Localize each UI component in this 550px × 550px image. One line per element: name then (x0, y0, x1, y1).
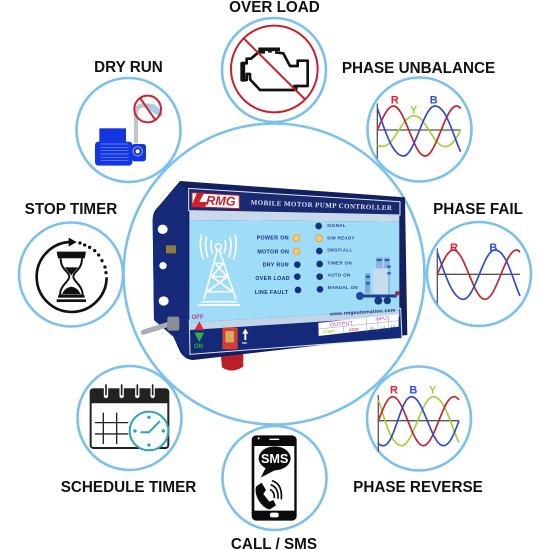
chart: unbalanced waves: B (430, 95, 438, 107)
enclosure (153, 181, 407, 360)
screen (189, 220, 399, 323)
output and input panel: STOP (349, 327, 359, 332)
header band (189, 188, 400, 215)
indicator lamps right (315, 223, 323, 293)
panel: dry run (76, 78, 180, 182)
indicator labels right: SIM READY (327, 235, 355, 240)
indicator labels right: SMS/CALL (327, 248, 353, 253)
panel: stop timer (19, 222, 123, 326)
website url: www.rmgautomation.com (329, 308, 396, 318)
logo RMG: RMG (206, 194, 236, 209)
output and input panel: L3 (391, 324, 395, 328)
sim arrow (242, 329, 248, 345)
tower graphic (198, 235, 240, 305)
indicator labels right: MANUAL ON (328, 285, 358, 290)
output and input panel: L2 (381, 325, 385, 329)
sim slot (222, 328, 238, 349)
chart: reversed waves: R (390, 385, 398, 397)
indicator lamps left (293, 235, 301, 293)
panel: phase reverse (367, 366, 471, 470)
chart: reversed waves (378, 385, 459, 452)
heading: dry run: DRY RUN (94, 59, 163, 76)
indicator labels left (255, 236, 290, 296)
chart: two-phase waves: R (450, 242, 458, 254)
chart: unbalanced waves: Y (410, 105, 418, 117)
panel: controller device circle (124, 124, 424, 424)
logo RMG (191, 193, 239, 209)
on marker (194, 333, 204, 350)
panel: schedule timer (78, 366, 182, 470)
panel: over load (222, 18, 326, 122)
icon: calendar with clock (90, 385, 168, 450)
output and input panel: L1 (370, 326, 374, 330)
chart: reversed waves: Y (429, 385, 437, 397)
output and input panel (318, 314, 399, 336)
face bottom band (189, 308, 402, 354)
sim arrow: SIM (242, 341, 247, 345)
output and input panel: OUTPUT (330, 321, 354, 329)
output and input panel: START (323, 329, 336, 334)
off marker (192, 315, 204, 330)
icon: hourglass timer (37, 238, 108, 312)
icon: smartphone with sms: SMS (261, 452, 288, 466)
panel: phase fail (427, 222, 531, 326)
indicator labels left: LINE FAULT (255, 290, 289, 296)
on marker: ON (194, 344, 203, 350)
panel: phase unbalance (368, 78, 472, 182)
side panel (153, 183, 189, 357)
indicator labels left: OVER LOAD (255, 276, 290, 282)
chart: unbalanced waves (377, 95, 461, 158)
device title: MOBILE MOTOR PUMP CONTROLLER (251, 199, 393, 212)
lower light strip (189, 310, 399, 330)
red push button (221, 354, 243, 370)
icon: dry pump (95, 96, 163, 166)
heading: schedule timer: SCHEDULE TIMER (61, 479, 196, 496)
chart: two-phase waves: B (489, 242, 497, 254)
heading: phase reverse: PHASE REVERSE (353, 479, 483, 496)
indicator labels right (327, 223, 358, 290)
heading: phase fail: PHASE FAIL (433, 201, 523, 218)
indicator labels right: AUTO ON (328, 273, 351, 278)
indicator labels left: MOTOR ON (257, 249, 289, 255)
antenna connector (166, 245, 176, 253)
indicator labels left: DRY RUN (263, 263, 289, 269)
chart: reversed waves: B (409, 385, 417, 397)
off marker: OFF (192, 315, 204, 321)
indicator labels right: TIMER ON (327, 260, 352, 265)
heading: phase unbalance: PHASE UNBALANCE (342, 60, 495, 77)
mounting holes (158, 225, 169, 306)
pump station graphic (356, 257, 400, 305)
icon: crossed engine (231, 26, 318, 112)
chart: two-phase waves (437, 242, 520, 303)
indicator labels left: POWER ON (257, 236, 289, 242)
chart: unbalanced waves: R (391, 95, 399, 107)
light strip (189, 211, 399, 222)
toggle switch (143, 317, 179, 332)
output and input panel: INPUT (375, 315, 390, 322)
heading: stop timer: STOP TIMER (25, 201, 117, 218)
device: mobile motor pump controller (143, 181, 407, 370)
panel: call / sms (222, 426, 326, 530)
indicator labels right: SIGNAL (327, 223, 346, 228)
